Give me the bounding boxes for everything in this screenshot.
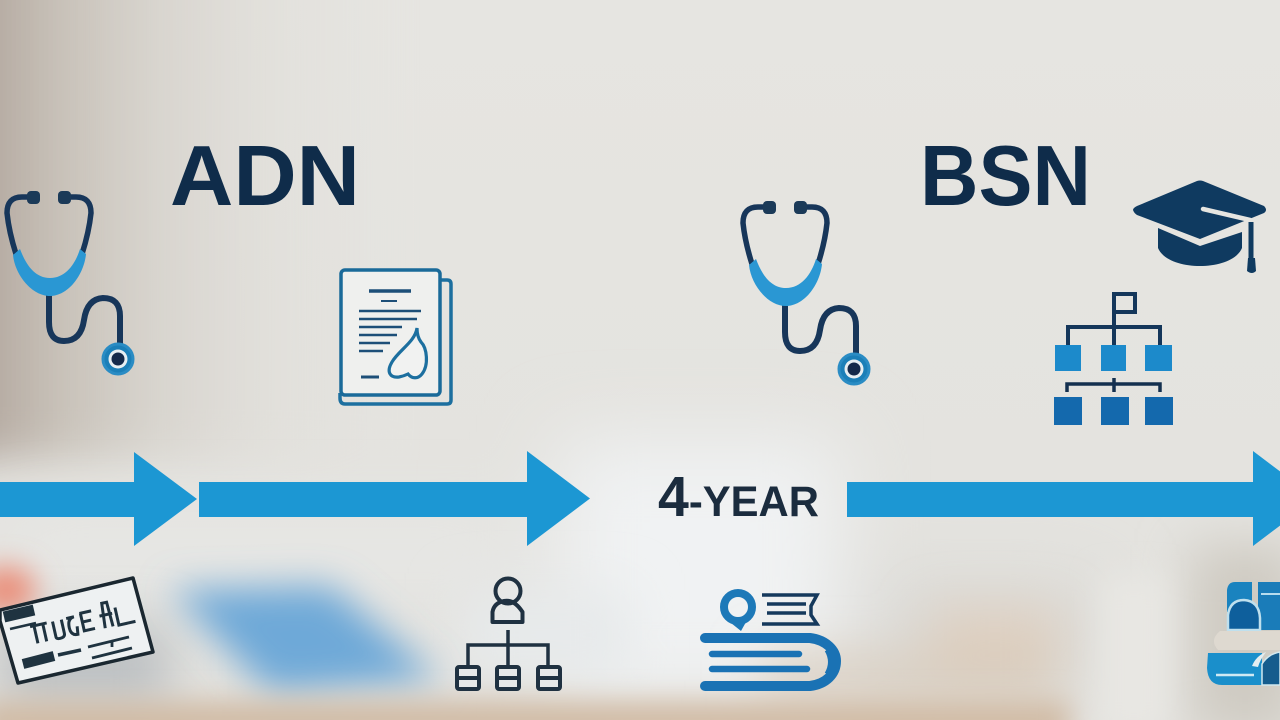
arrow: second: [199, 451, 590, 546]
icon: graduation cap: [1133, 180, 1266, 273]
icon: person with org chart: [457, 578, 560, 689]
arrow: third: [847, 451, 1280, 546]
icon: stethoscope left: [7, 191, 133, 374]
icon: book stack right edge: [1207, 582, 1280, 685]
icon: org chart with flag: [1054, 294, 1173, 425]
icon: stethoscope right: [743, 201, 869, 384]
icon: books with location pin: [705, 593, 836, 686]
arrow: first: [0, 452, 197, 546]
icon: ID card: [0, 578, 153, 683]
label: 4-YEAR: 4-YEAR: [658, 465, 819, 529]
icon: document with pear: [340, 270, 451, 404]
heading: BSN: BSN: [920, 129, 1091, 224]
heading: ADN: ADN: [170, 129, 360, 224]
